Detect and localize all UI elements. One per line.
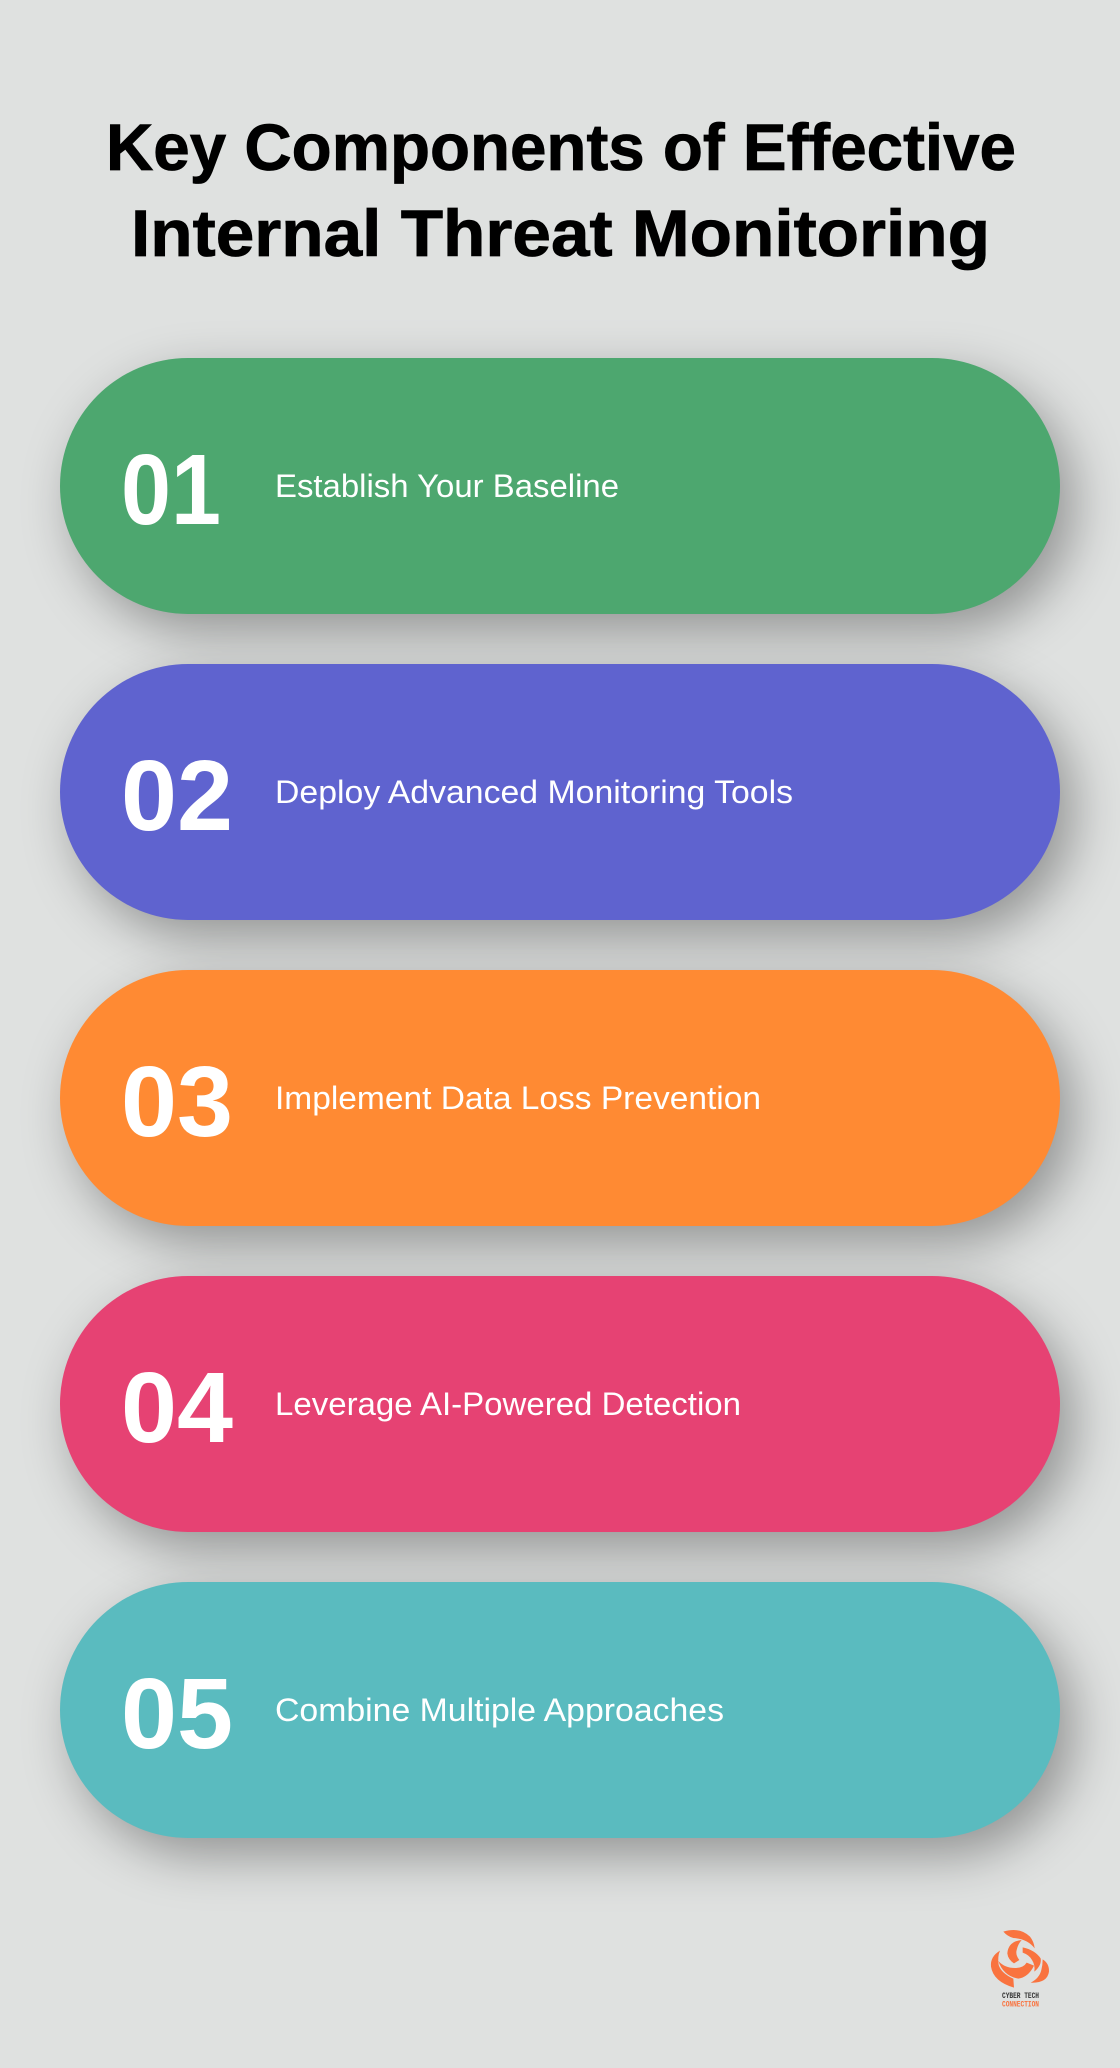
step number 01: 01 bbox=[121, 434, 221, 546]
panel: step 03 bbox=[60, 970, 1060, 1226]
logo text: Cyber Tech: CYBER TECH bbox=[1002, 1992, 1039, 2001]
label: Combine Multiple Approaches: Combine Multiple Approaches bbox=[275, 1692, 724, 1728]
step number 03: 03 bbox=[121, 1046, 233, 1158]
panel: step 01 bbox=[60, 358, 1060, 614]
label: Establish Your Baseline: Establish Your Baseline bbox=[275, 468, 619, 504]
step number 02: 02 bbox=[121, 740, 233, 852]
label: Implement Data Loss Prevention: Implement Data Loss Prevention bbox=[275, 1080, 761, 1116]
logo text: Connection: CONNECTION bbox=[1002, 2000, 1039, 2010]
step number 05: 05 bbox=[121, 1658, 233, 1770]
step number 04: 04 bbox=[121, 1352, 233, 1464]
label: Deploy Advanced Monitoring Tools: Deploy Advanced Monitoring Tools bbox=[275, 774, 793, 810]
icon: swirl mark bbox=[991, 1930, 1049, 1988]
logo: Cyber Tech Connection bbox=[990, 1930, 1049, 2010]
title: Key Components of Effective bbox=[106, 110, 1016, 184]
panel: step 02 bbox=[60, 664, 1060, 920]
label: Leverage AI-Powered Detection: Leverage AI-Powered Detection bbox=[275, 1386, 741, 1422]
title: Internal Threat Monitoring bbox=[131, 196, 990, 270]
panel: step 04 bbox=[60, 1276, 1060, 1532]
panel: step 05 bbox=[60, 1582, 1060, 1838]
title bbox=[106, 110, 1016, 270]
